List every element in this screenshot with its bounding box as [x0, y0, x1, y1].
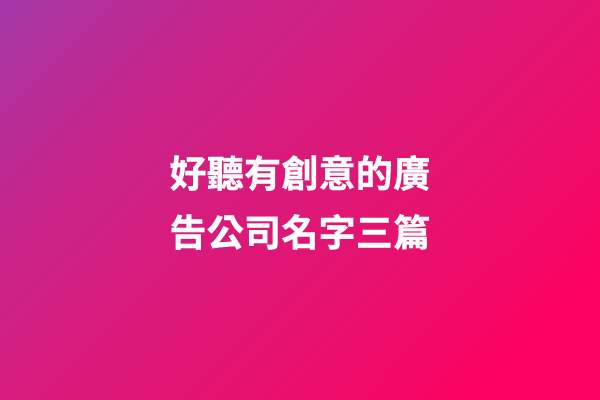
title: 告公司名字三篇	[169, 213, 431, 254]
title	[169, 154, 431, 254]
title: 好聽有創意的廣	[169, 154, 431, 195]
